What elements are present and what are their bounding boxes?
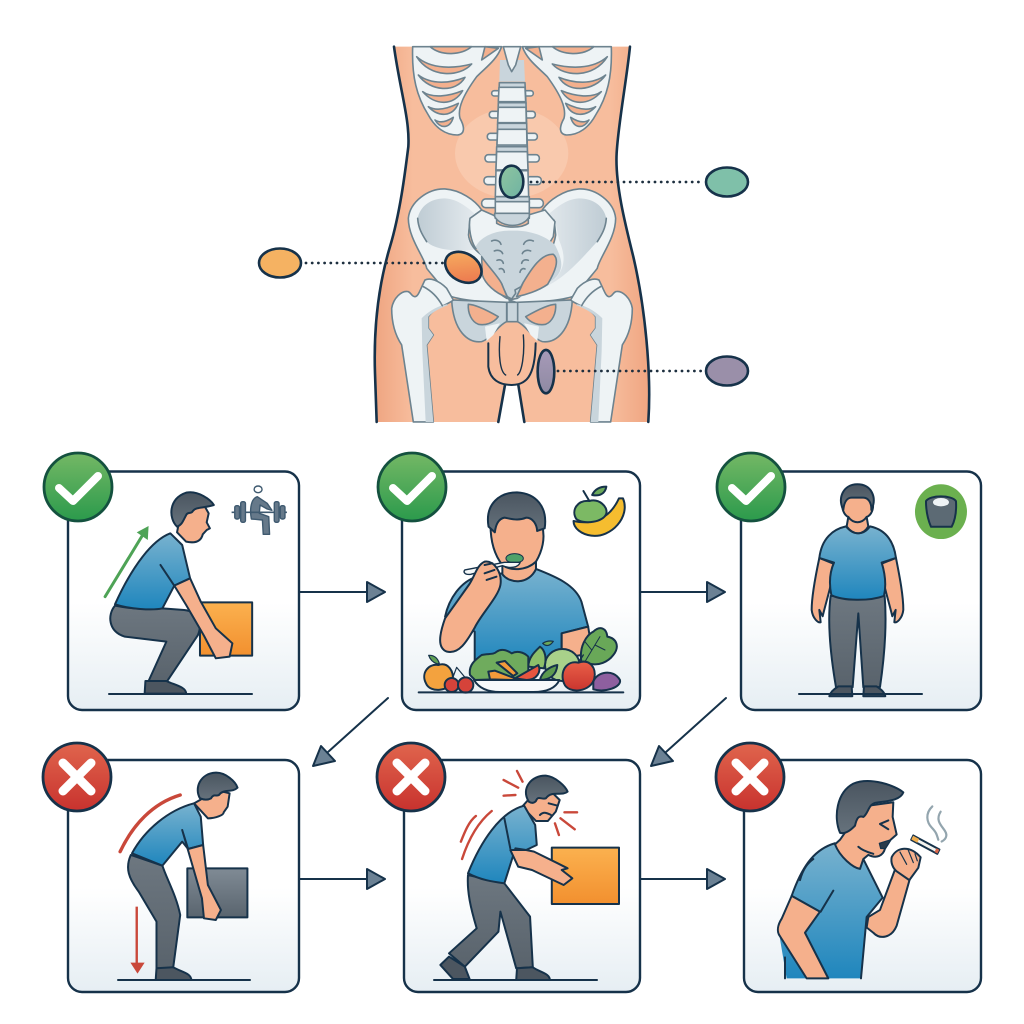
near arm bbox=[778, 896, 828, 978]
food display bbox=[419, 628, 623, 693]
left femur bbox=[392, 279, 453, 422]
head bbox=[522, 776, 568, 821]
tomato wedge bbox=[515, 665, 539, 680]
femurs bbox=[392, 279, 632, 422]
strain marks bbox=[461, 771, 577, 859]
neck and face bbox=[842, 494, 873, 533]
head bbox=[194, 773, 238, 818]
hair bbox=[837, 781, 903, 833]
arrow: panel 5 to 6 bbox=[640, 869, 725, 889]
trousers bbox=[110, 606, 200, 682]
arrow: panel 1 to 2 bbox=[300, 582, 385, 602]
check badge 1 bbox=[44, 453, 112, 521]
shirt bbox=[445, 569, 588, 665]
head bbox=[171, 492, 214, 542]
shirt bbox=[819, 526, 896, 600]
callout leader: upper right bbox=[531, 168, 748, 196]
figure squatting with box bbox=[105, 492, 252, 694]
hair bbox=[841, 484, 874, 510]
trousers bbox=[128, 855, 180, 968]
pear bbox=[528, 647, 546, 668]
figure straining with orange box bbox=[440, 771, 619, 980]
left ribs bbox=[413, 47, 502, 135]
pubic symphysis bbox=[507, 302, 518, 322]
panel: healthy eating bbox=[402, 472, 640, 710]
panel: incorrect lifting bbox=[68, 760, 299, 992]
icon: apple and banana bbox=[574, 487, 625, 536]
bowl bbox=[474, 680, 559, 692]
check badge 2 bbox=[378, 453, 446, 521]
figure eating bbox=[440, 487, 625, 665]
left ilium bbox=[408, 189, 515, 303]
orange fruit bbox=[424, 664, 453, 690]
gray box bbox=[187, 868, 247, 917]
shirt bbox=[132, 803, 203, 866]
callout leader: lower right bbox=[558, 356, 748, 386]
orange box bbox=[552, 848, 619, 904]
posture arrow bbox=[105, 526, 149, 597]
arrow: panel 2 to 3 bbox=[640, 582, 725, 602]
shoe bbox=[145, 681, 186, 694]
cross badge 6 bbox=[716, 743, 784, 811]
shoe bbox=[156, 967, 191, 980]
spine bbox=[482, 47, 543, 225]
smoke bbox=[927, 806, 946, 842]
right femur bbox=[571, 279, 632, 422]
panel: healthy weight bbox=[741, 472, 981, 710]
hair bbox=[488, 492, 545, 532]
sacrum block bbox=[469, 210, 555, 248]
marker: inguinal site bbox=[440, 246, 487, 289]
raised arm bbox=[440, 562, 501, 652]
marker: umbilical site bbox=[500, 166, 523, 198]
shoes bbox=[829, 686, 885, 696]
abdominal glow bbox=[455, 108, 568, 198]
neck and face bbox=[491, 515, 544, 581]
leafy green bbox=[581, 628, 617, 664]
shirt bbox=[115, 533, 190, 609]
red apple bbox=[563, 662, 595, 690]
pelvic openings bbox=[482, 257, 507, 297]
potato bbox=[593, 673, 620, 690]
right ribs bbox=[522, 47, 611, 135]
cross badge 4 bbox=[43, 743, 111, 811]
cabbage bbox=[545, 649, 580, 681]
right ilium bbox=[509, 189, 616, 303]
carrots bbox=[497, 661, 517, 676]
sacrum bbox=[476, 231, 561, 298]
icon: scale bbox=[915, 484, 967, 539]
standing figure bbox=[812, 484, 967, 696]
arms bbox=[812, 558, 903, 622]
floor bbox=[799, 693, 922, 695]
arm bbox=[510, 850, 572, 885]
arrow: panel 4 to 5 bbox=[300, 869, 385, 889]
box bbox=[200, 602, 252, 656]
neck and face bbox=[835, 802, 897, 869]
right forearm bbox=[562, 627, 591, 658]
panel: correct lifting bbox=[68, 472, 299, 710]
raised forearm bbox=[867, 870, 910, 937]
food on spoon bbox=[506, 554, 523, 563]
shirt bbox=[778, 843, 883, 978]
cross badge 5 bbox=[377, 743, 445, 811]
trousers bbox=[449, 875, 533, 968]
callout leader: left bbox=[259, 248, 444, 278]
panel: lifting strain bbox=[404, 760, 640, 992]
marker: femoral site bbox=[538, 350, 554, 393]
anatomy diagram: torso and pelvis bbox=[375, 47, 649, 422]
floor bbox=[109, 693, 252, 695]
down arrow bbox=[130, 907, 145, 974]
arrow: panel 3 to 5 bbox=[651, 698, 726, 766]
floor bbox=[434, 979, 597, 981]
cigarette bbox=[911, 835, 939, 854]
cherries bbox=[445, 667, 473, 693]
lower pelvis left bbox=[452, 300, 507, 342]
pelvis bbox=[392, 189, 632, 422]
body outline bbox=[375, 47, 649, 422]
arm bbox=[174, 578, 232, 658]
trousers bbox=[829, 596, 886, 687]
table line bbox=[419, 691, 623, 693]
arrow: panel 2 to 4 bbox=[313, 698, 388, 766]
shirt bbox=[468, 806, 537, 883]
floor bbox=[118, 979, 250, 981]
panel: smoking bbox=[744, 760, 981, 992]
shoes bbox=[440, 957, 550, 980]
figure bending with gray box bbox=[120, 773, 247, 980]
smoker figure bbox=[778, 781, 946, 978]
greens bbox=[470, 650, 528, 680]
torso skin bbox=[375, 47, 649, 422]
rib cage bbox=[413, 47, 611, 135]
open mouth bbox=[879, 840, 891, 849]
lower pelvis right bbox=[517, 300, 572, 342]
groin bbox=[488, 335, 536, 385]
arm bbox=[182, 830, 221, 920]
fist bbox=[891, 849, 921, 880]
icon: weight lifting bbox=[232, 486, 287, 534]
spine curve mark bbox=[120, 795, 180, 852]
check badge 3 bbox=[717, 453, 785, 521]
spoon bbox=[464, 562, 520, 574]
